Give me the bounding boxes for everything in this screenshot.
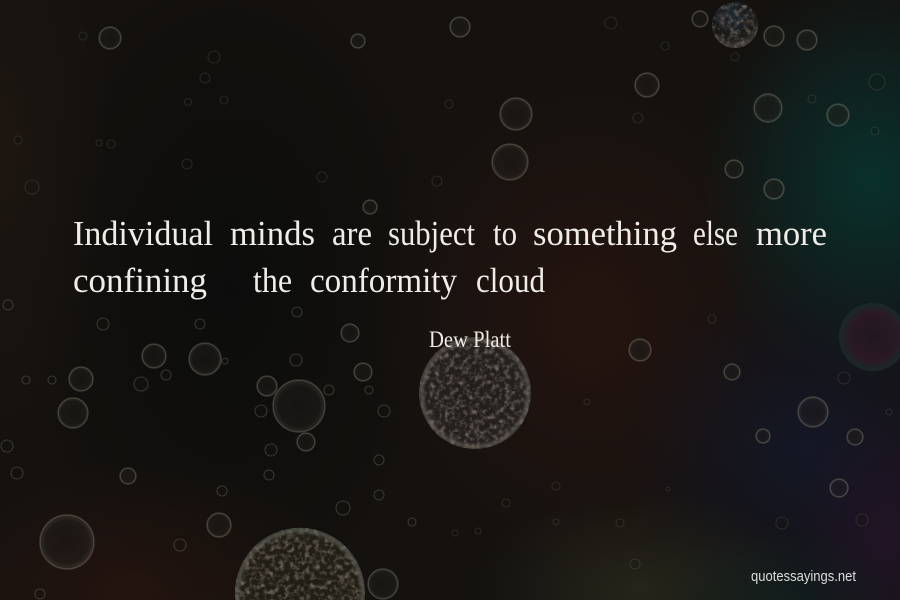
- line 1: to: [493, 214, 517, 253]
- bubble: centre large: [419, 337, 531, 449]
- line 1: subject: [388, 214, 475, 253]
- line 2: conformity: [310, 261, 457, 300]
- line 1: else: [693, 214, 738, 253]
- bubble: bottom large: [235, 528, 365, 600]
- line 1: minds: [230, 214, 315, 253]
- large textured bubbles: [235, 2, 900, 600]
- line 1: more: [756, 214, 827, 253]
- line 1: are: [332, 214, 372, 253]
- line 2: cloud: [476, 261, 545, 300]
- line 1: Individual: [73, 214, 213, 253]
- line 2: confining: [73, 261, 207, 300]
- line 2: the: [253, 261, 292, 300]
- line 2: [73, 261, 545, 300]
- line 1: [73, 214, 827, 253]
- author: Dew Platt: [429, 327, 512, 352]
- quote text: [73, 214, 827, 300]
- line 1: something: [533, 214, 677, 253]
- bubble: right purple: [839, 303, 900, 371]
- small bubbles: [1, 300, 416, 599]
- bubble: top right textured: [712, 2, 758, 48]
- watermark: quotessayings.net: [751, 569, 856, 585]
